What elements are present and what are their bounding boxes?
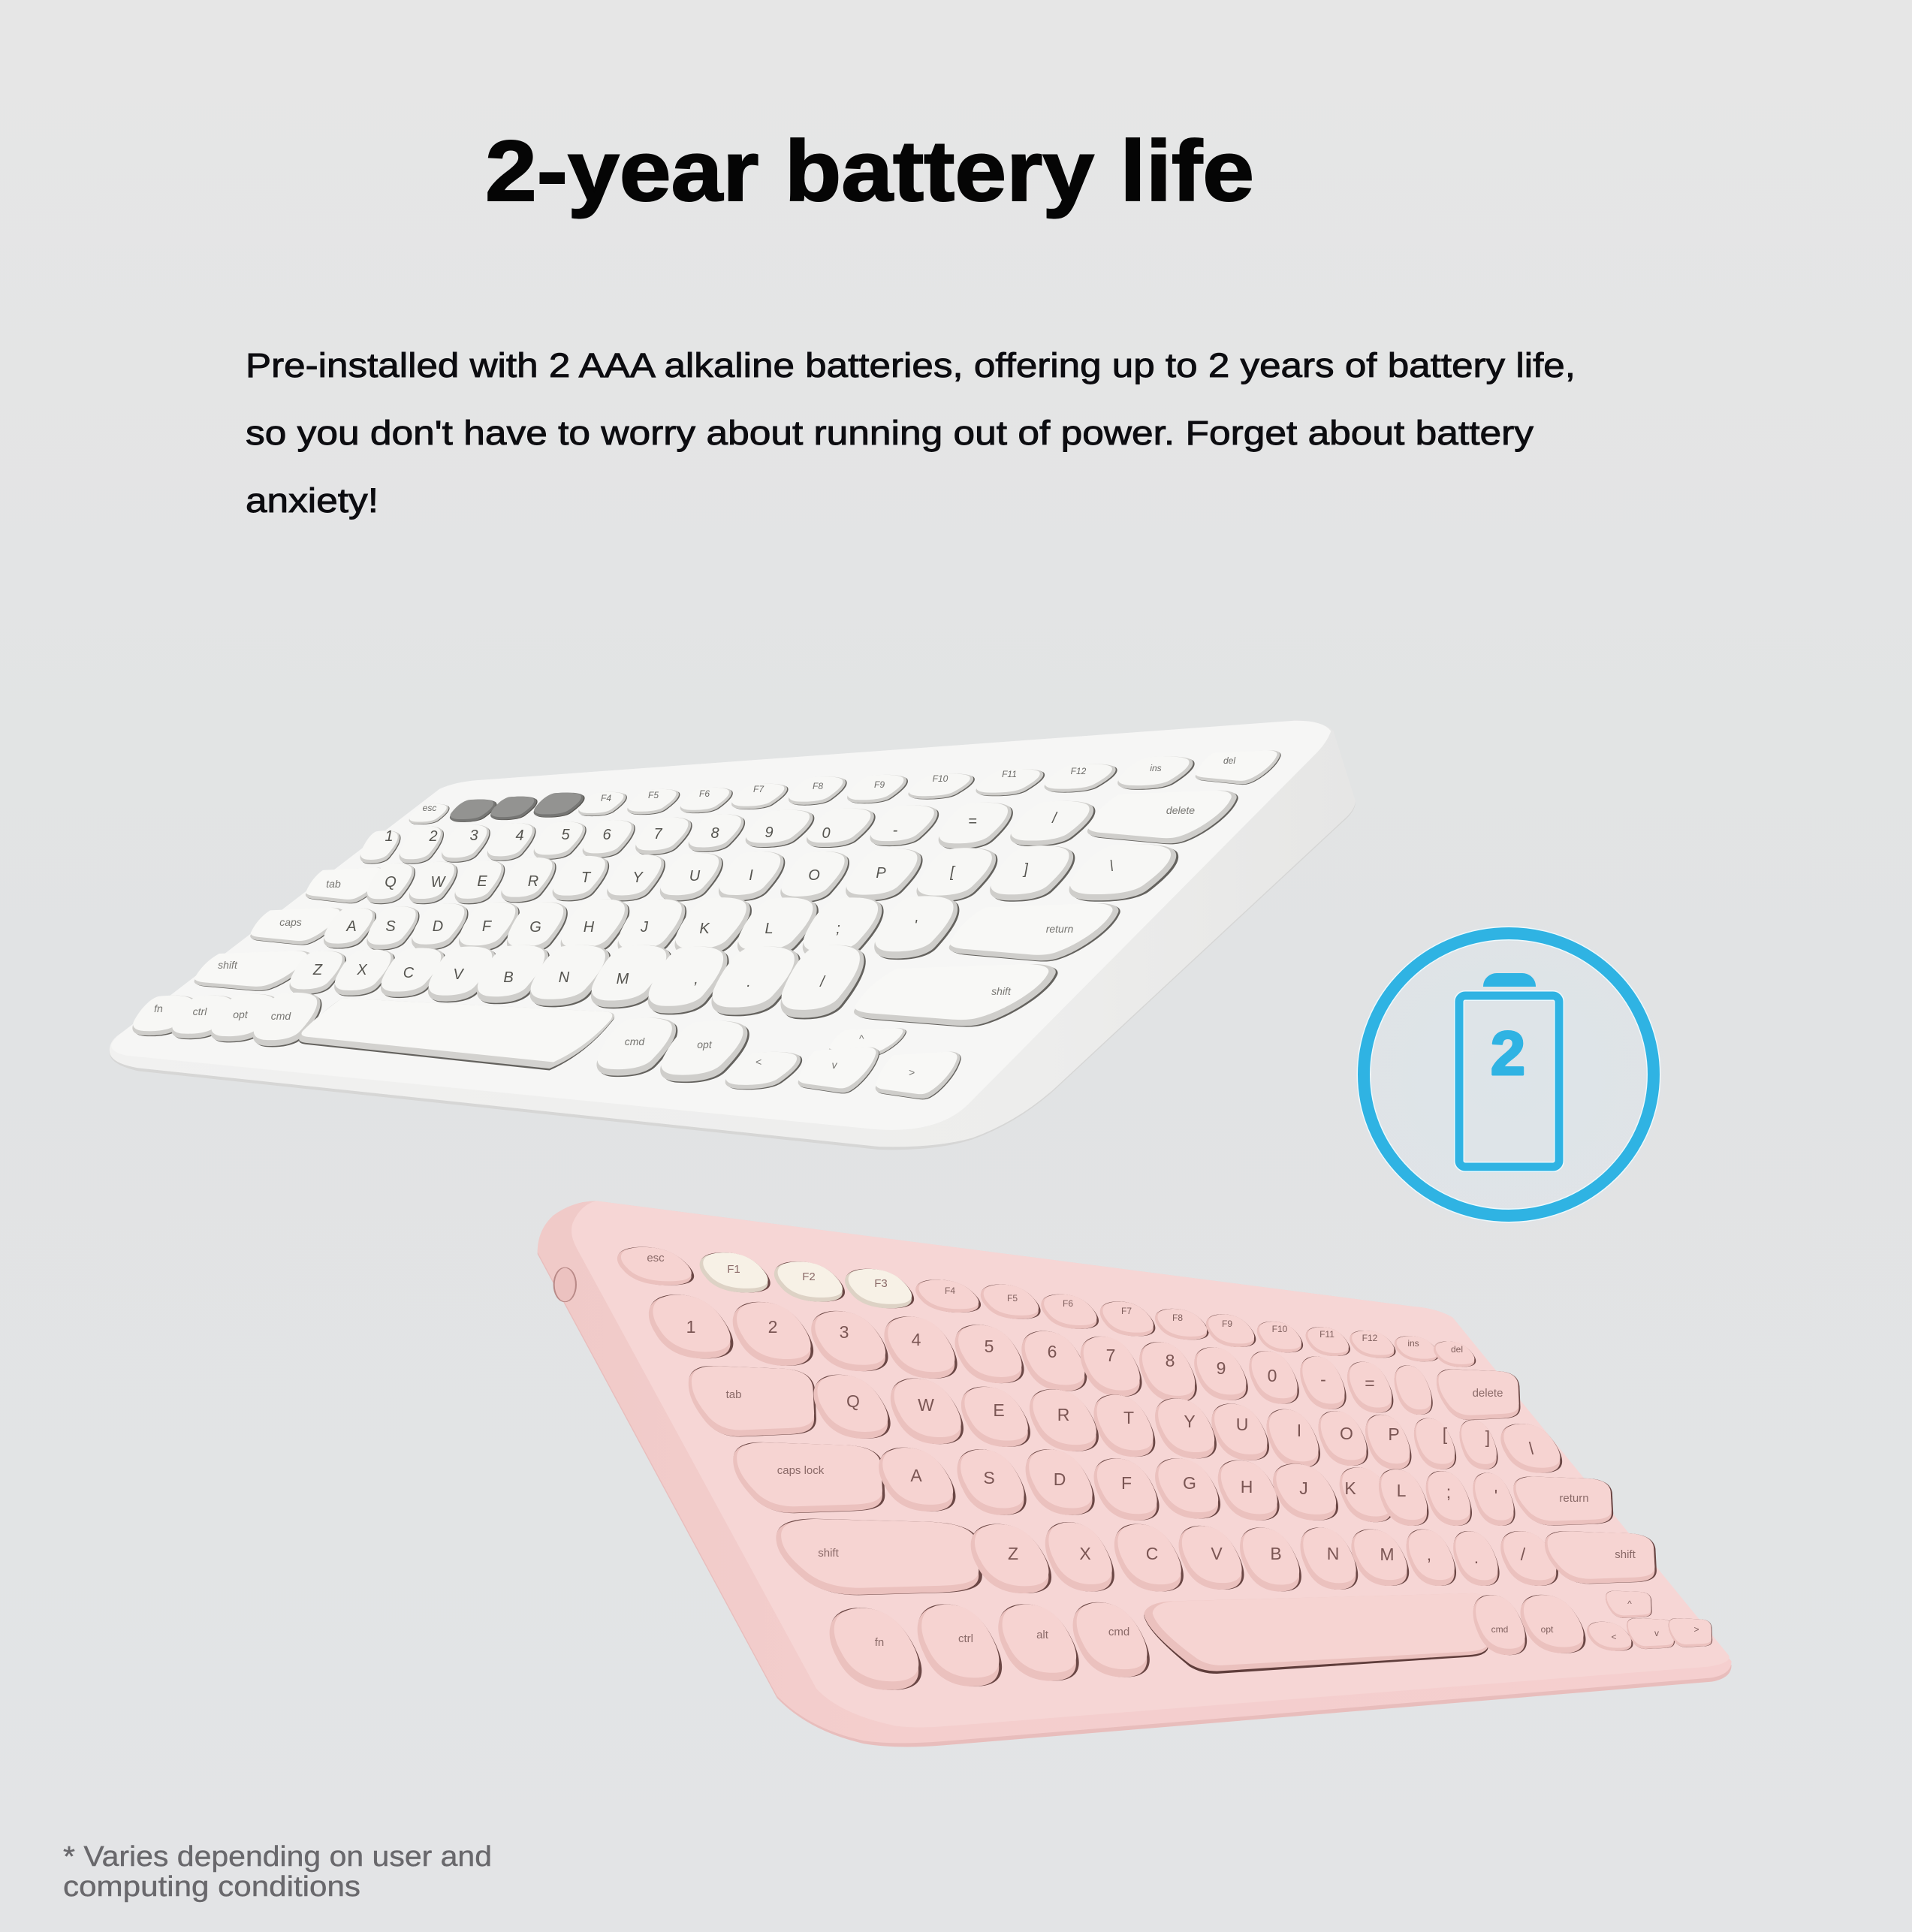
white keyboard key labels: = [968, 813, 977, 830]
pink keyboard key labels: ^ [1627, 1599, 1632, 1609]
white keyboard key labels: O [808, 867, 820, 884]
title: 2-year battery life [485, 124, 1254, 219]
pink keyboard key labels: H [1241, 1477, 1253, 1496]
battery body [1459, 996, 1559, 1167]
pink keyboard key labels: N [1327, 1544, 1339, 1563]
pink keyboard key labels: cmd [1491, 1624, 1508, 1635]
pink keyboard key labels: F2 [802, 1270, 816, 1283]
pink keyboard key labels: Q [846, 1391, 860, 1411]
pink keyboard key labels: F11 [1319, 1329, 1334, 1340]
white keyboard key labels: 9 [764, 824, 774, 841]
white keyboard body [110, 721, 1356, 1150]
body text: so you don't have to worry about running out of power. Forget about battery [246, 414, 1534, 452]
white keyboard key labels: v [832, 1059, 838, 1071]
white keyboard key labels: I [749, 867, 753, 884]
white keyboard key labels: F10 [933, 773, 948, 784]
white keyboard key labels: [ [949, 864, 956, 881]
white keyboard key labels: 7 [653, 826, 662, 842]
pink keyboard key labels: J [1299, 1478, 1308, 1498]
pink keyboard key labels: M [1380, 1545, 1395, 1564]
pink keyboard key labels: F5 [1007, 1293, 1018, 1304]
pink keyboard key labels: F10 [1272, 1324, 1288, 1334]
pink keyboard key labels: F [1121, 1473, 1132, 1493]
pink keyboard key labels [647, 1252, 1699, 1649]
white keyboard key labels: F6 [699, 788, 710, 799]
pink keyboard key labels: B [1270, 1544, 1282, 1563]
footnote [63, 1841, 492, 1903]
white keyboard key labels: D [433, 918, 443, 935]
white keyboard key labels: T [581, 870, 592, 886]
pink keyboard key labels: 5 [985, 1337, 994, 1356]
white keyboard key labels: 2 [428, 828, 438, 845]
letter row 3 [195, 945, 1058, 1027]
white keyboard key labels: ; [836, 921, 840, 937]
pink keyboard key labels: / [1521, 1545, 1526, 1564]
white keyboard key labels: 5 [561, 827, 570, 843]
pink keyboard key labels: F9 [1222, 1319, 1232, 1329]
pink keyboard key labels: G [1183, 1473, 1196, 1493]
white keyboard key labels: E [477, 873, 487, 890]
letter row 1 [689, 1366, 1562, 1473]
white keyboard key labels: esc [423, 803, 436, 813]
pink keyboard key labels: Z [1008, 1544, 1018, 1563]
white keyboard key labels: X [356, 962, 367, 978]
pink keyboard key labels: delete [1473, 1387, 1503, 1400]
white keyboard key labels: A [345, 918, 357, 935]
white keyboard key labels: F7 [753, 784, 764, 794]
pink keyboard key labels: ' [1494, 1486, 1497, 1506]
footnote: * Varies depending on user and [63, 1841, 492, 1873]
white keyboard key labels: F11 [1002, 769, 1017, 779]
pink keyboard key labels: tab [726, 1388, 741, 1401]
white keyboard key labels: / [1051, 810, 1058, 827]
pink keyboard key labels: esc [647, 1252, 665, 1264]
white keyboard key labels: ' [914, 918, 918, 934]
pink keyboard key labels: C [1146, 1544, 1158, 1563]
pink keyboard key labels: 8 [1166, 1351, 1175, 1370]
pink keyboard key labels: caps lock [777, 1464, 825, 1477]
white keyboard [110, 721, 1356, 1150]
white keyboard key labels: fn [154, 1002, 163, 1014]
pink keyboard key labels: \ [1529, 1439, 1534, 1458]
white keyboard key labels: G [529, 919, 541, 936]
pink keyboard key labels: shift [818, 1547, 840, 1560]
white keyboard key labels: 3 [469, 827, 478, 844]
pink keyboard key labels: ] [1485, 1427, 1490, 1447]
white keyboard keys [132, 750, 1281, 1099]
number row [360, 791, 1238, 864]
white keyboard key labels: P [876, 865, 886, 882]
body text: Pre-installed with 2 AAA alkaline batteries, offering up to 2 years of battery life, [246, 346, 1576, 384]
body text: anxiety! [246, 481, 378, 520]
white keyboard key labels: shift [218, 959, 238, 971]
pink keyboard key labels: > [1693, 1624, 1699, 1635]
pink keyboard key labels: F1 [727, 1263, 740, 1276]
pink keyboard key labels: S [983, 1468, 995, 1487]
pink keyboard key labels: ins [1407, 1338, 1419, 1349]
pink keyboard key labels: P [1388, 1424, 1400, 1444]
pink keyboard power switch [554, 1267, 576, 1302]
white keyboard key labels: cmd [271, 1010, 291, 1022]
pink keyboard keys [617, 1247, 1712, 1690]
letter row 2 [733, 1442, 1613, 1526]
white keyboard key labels: return [1046, 923, 1073, 935]
function row [617, 1247, 1476, 1367]
white keyboard key labels: Y [632, 870, 644, 886]
white keyboard key labels: . [746, 974, 751, 990]
battery cap [1483, 973, 1536, 987]
white keyboard key labels: F4 [601, 793, 611, 803]
white keyboard key labels: delete [1166, 804, 1195, 816]
pink keyboard key labels: E [993, 1400, 1005, 1420]
pink keyboard key labels: 3 [840, 1322, 849, 1342]
pink keyboard key labels: , [1427, 1545, 1431, 1564]
white keyboard key labels: caps [279, 916, 302, 928]
pink keyboard key labels: F7 [1121, 1306, 1132, 1316]
pink keyboard key labels: 0 [1268, 1366, 1277, 1385]
white keyboard key labels: R [528, 873, 538, 890]
pink keyboard key labels: K [1344, 1478, 1356, 1498]
pink keyboard key labels: F4 [945, 1285, 955, 1296]
white keyboard key labels: > [909, 1066, 915, 1078]
white keyboard key labels: J [640, 919, 649, 936]
pink keyboard key labels: - [1320, 1370, 1326, 1389]
pink keyboard key labels: = [1365, 1373, 1375, 1393]
letter row 2 [250, 896, 1120, 962]
pink keyboard key labels: D [1054, 1469, 1066, 1489]
white keyboard key labels: ins [1150, 763, 1162, 773]
white keyboard key labels: / [819, 974, 826, 990]
white keyboard key labels: \ [1109, 858, 1114, 875]
pink keyboard key labels: 6 [1048, 1342, 1057, 1361]
pink keyboard key labels: F8 [1172, 1313, 1183, 1323]
pink keyboard key labels: F3 [874, 1277, 888, 1290]
pink keyboard key labels: L [1397, 1481, 1407, 1500]
pink keyboard key labels: v [1654, 1628, 1659, 1638]
white keyboard key labels: ] [1022, 861, 1028, 878]
pink keyboard key labels: 7 [1106, 1346, 1115, 1365]
pink keyboard key labels: T [1123, 1408, 1134, 1427]
white keyboard key labels: F9 [874, 779, 885, 790]
pink keyboard key labels: [ [1443, 1424, 1448, 1444]
pink keyboard [538, 1201, 1732, 1747]
pink keyboard key labels: fn [875, 1636, 884, 1649]
white keyboard key labels: opt [233, 1008, 249, 1020]
white keyboard key labels [154, 755, 1235, 1078]
white keyboard key labels: U [689, 868, 701, 885]
white keyboard key labels: tab [326, 878, 341, 890]
pink keyboard body [538, 1201, 1732, 1747]
pink keyboard key labels: F12 [1362, 1333, 1378, 1343]
pink keyboard key labels: I [1297, 1421, 1301, 1440]
pink keyboard key labels: cmd [1108, 1626, 1129, 1638]
icon glow [1350, 919, 1668, 1230]
pink keyboard key labels: U [1236, 1415, 1248, 1434]
white keyboard key labels: - [893, 822, 898, 839]
pink keyboard key labels: < [1611, 1632, 1617, 1642]
pink keyboard key labels: return [1559, 1492, 1589, 1505]
white keyboard key labels: Q [385, 874, 397, 891]
pink keyboard key labels: . [1474, 1548, 1479, 1567]
white keyboard key labels: K [699, 921, 710, 937]
white keyboard key labels: 0 [822, 825, 831, 842]
footnote: computing conditions [63, 1871, 360, 1903]
white keyboard key labels: C [403, 965, 415, 981]
white keyboard key labels: 6 [602, 827, 611, 843]
white keyboard key labels: W [431, 874, 447, 891]
white keyboard key labels: del [1223, 755, 1235, 766]
white keyboard key labels: Z [312, 962, 323, 978]
body text [246, 346, 1576, 520]
white keyboard key labels: F5 [648, 790, 659, 800]
battery number: 2 [1491, 1018, 1525, 1088]
white keyboard key labels: F12 [1071, 766, 1087, 776]
pink keyboard key labels: 4 [912, 1330, 921, 1349]
pink keyboard key labels: alt [1036, 1629, 1049, 1641]
white keyboard key labels: B [503, 969, 514, 986]
white keyboard key labels: H [584, 919, 595, 936]
white keyboard key labels: N [559, 969, 570, 986]
icon: battery with 2 in a circle [1350, 919, 1668, 1230]
bottom row [830, 1591, 1712, 1690]
white keyboard key labels: 4 [515, 827, 524, 844]
function row [409, 750, 1281, 824]
white keyboard key labels: , [694, 971, 698, 987]
letter row 1 [306, 844, 1178, 904]
white keyboard key labels: F8 [813, 781, 823, 791]
white keyboard key labels: cmd [625, 1035, 645, 1047]
white keyboard key labels: L [764, 921, 774, 937]
pink keyboard key labels: Y [1184, 1412, 1196, 1431]
pink keyboard key labels: V [1211, 1544, 1223, 1563]
pink keyboard key labels: opt [1541, 1624, 1554, 1635]
white keyboard key labels: ctrl [193, 1005, 207, 1017]
pink keyboard key labels: ctrl [958, 1632, 973, 1645]
white keyboard key labels: 8 [710, 825, 719, 842]
white keyboard key labels: F [482, 918, 493, 935]
icon ring [1364, 933, 1654, 1216]
pink keyboard key labels: shift [1615, 1548, 1636, 1561]
pink keyboard key labels: W [918, 1395, 934, 1415]
bottom row [132, 993, 961, 1099]
pink keyboard key labels: O [1340, 1424, 1353, 1443]
pink keyboard key labels: 2 [768, 1317, 777, 1337]
white keyboard key labels: 1 [385, 828, 394, 845]
letter row 3 [776, 1519, 1657, 1595]
pink keyboard key labels: A [910, 1466, 922, 1485]
pink keyboard key labels: 9 [1217, 1358, 1226, 1378]
pink keyboard key labels: del [1451, 1344, 1463, 1355]
pink keyboard key labels: 1 [686, 1317, 695, 1337]
white keyboard key labels: V [453, 966, 464, 983]
white keyboard key labels: S [385, 918, 396, 935]
white keyboard key labels: ^ [859, 1032, 864, 1044]
white keyboard key labels: < [755, 1056, 761, 1068]
white keyboard key labels: shift [991, 985, 1012, 997]
pink keyboard key labels: ; [1446, 1482, 1451, 1502]
white keyboard key labels: M [617, 971, 629, 987]
number row [649, 1295, 1521, 1420]
pink keyboard key labels: F6 [1063, 1298, 1073, 1309]
pink keyboard key labels: R [1057, 1405, 1069, 1424]
pink keyboard key labels: X [1079, 1544, 1091, 1563]
white keyboard key labels: opt [697, 1038, 713, 1050]
